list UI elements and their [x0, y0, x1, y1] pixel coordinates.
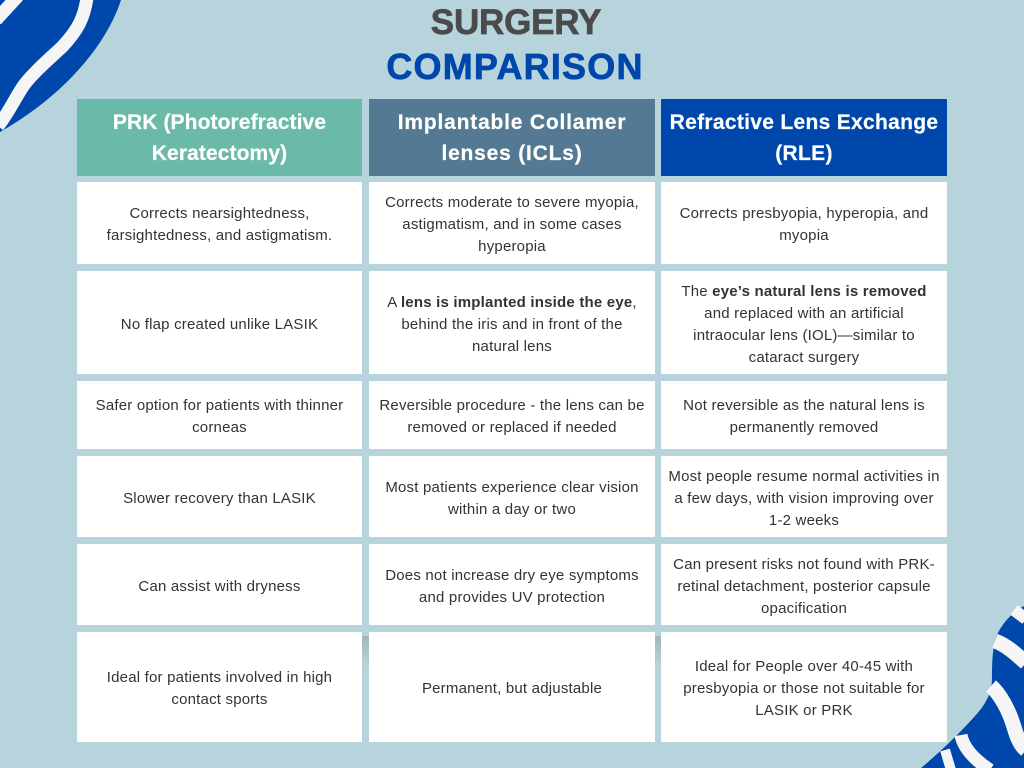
header: PRK: Keratectomy): [152, 142, 287, 164]
row 6: RLE: LASIK or PRK: [755, 702, 853, 719]
row 2: RLE: cataract surgery: [749, 348, 859, 366]
row 1: RLE: myopia: [779, 227, 829, 244]
row 5: RLE: retinal detachment, posterior capsule: [677, 578, 931, 594]
row 1: PRK: [77, 182, 362, 264]
row 3: PRK: [77, 381, 362, 449]
row 1: ICL: astigmatism, and in some cases: [402, 216, 622, 233]
header: PRK: [77, 99, 362, 176]
row 3: ICL: [369, 381, 655, 449]
header: ICL: lenses (ICLs): [441, 142, 583, 164]
row 2: RLE: [661, 271, 947, 374]
row 5: RLE: Can present risks not found with PRK-: [673, 556, 935, 572]
row 4: RLE: a few days, with vision improving over: [674, 490, 934, 506]
header: PRK: PRK (Photorefractive: [113, 110, 326, 134]
row 1: ICL: hyperopia: [478, 238, 546, 255]
row 1: PRK: Corrects nearsightedness,: [129, 205, 310, 222]
row 3: RLE: permanently removed: [730, 419, 878, 436]
row 2: ICL: behind the iris and in front of the: [401, 316, 623, 332]
row 2: RLE: and replaced with an artificial: [704, 304, 904, 322]
row 4: PRK: [77, 456, 362, 537]
row 3: PRK: Safer option for patients with thinner: [96, 397, 343, 414]
row 5: ICL: and provides UV protection: [419, 588, 605, 606]
row 2: ICL: A lens is implanted inside the eye,: [387, 294, 637, 310]
row 5: PRK: Can assist with dryness: [138, 578, 301, 594]
row 4: ICL: [369, 456, 655, 537]
row 2: RLE: intraocular lens (IOL)—similar to: [693, 326, 915, 344]
row 5: ICL: Does not increase dry eye symptoms: [385, 566, 639, 584]
row 1: ICL: Corrects moderate to severe myopia,: [385, 194, 639, 211]
top-left blue wave: [0, 0, 121, 132]
row 2: PRK: [77, 271, 362, 374]
row 5: RLE: opacification: [761, 600, 847, 616]
row 4: ICL: within a day or two: [448, 500, 576, 518]
row 4: PRK: Slower recovery than LASIK: [123, 490, 316, 506]
row 3: ICL: removed or replaced if needed: [407, 419, 617, 436]
row 6: PRK: [77, 632, 362, 742]
header: ICL: [369, 99, 655, 176]
row 1: ICL: [369, 182, 655, 264]
row 3: PRK: corneas: [192, 419, 247, 436]
row 3: RLE: [661, 381, 947, 449]
row 5: ICL: [369, 544, 655, 625]
row 6: ICL: Permanent, but adjustable: [422, 680, 602, 697]
row 6: ICL: [369, 632, 655, 742]
row 2: PRK: No flap created unlike LASIK: [121, 316, 318, 332]
title: surgery: SURGERY: [431, 3, 601, 42]
row 6: PRK: Ideal for patients involved in high: [107, 669, 332, 686]
header: RLE: (RLE): [775, 142, 833, 164]
row 1: RLE: Corrects presbyopia, hyperopia, and: [680, 205, 928, 222]
row 2: ICL: natural lens: [472, 338, 552, 354]
row 2: ICL: [369, 271, 655, 374]
row 4: RLE: [661, 456, 947, 537]
row 1: RLE: [661, 182, 947, 264]
row 6: PRK: contact sports: [171, 691, 268, 708]
row 6: RLE: presbyopia or those not suitable for: [683, 680, 925, 697]
row 5: PRK: [77, 544, 362, 625]
row 1: PRK: farsightedness, and astigmatism.: [107, 227, 332, 244]
header: RLE: Refractive Lens Exchange: [670, 110, 938, 134]
row 3: RLE: Not reversible as the natural lens is: [683, 397, 925, 414]
row 4: ICL: Most patients experience clear vision: [385, 478, 639, 496]
row 4: RLE: Most people resume normal activities in: [668, 468, 940, 484]
row 6: RLE: Ideal for People over 40-45 with: [695, 658, 913, 675]
row 2: RLE: The eye’s natural lens is removed: [681, 282, 927, 300]
bottom-right blue wave: [921, 606, 1024, 768]
header: ICL: Implantable Collamer: [398, 110, 626, 134]
row 3: ICL: Reversible procedure - the lens can be: [379, 397, 645, 414]
row 5: RLE: [661, 544, 947, 625]
row 6: RLE: [661, 632, 947, 742]
row 4: RLE: 1-2 weeks: [769, 512, 839, 528]
title: comparison: COMPARISON: [386, 46, 644, 87]
header: RLE: [661, 99, 947, 176]
